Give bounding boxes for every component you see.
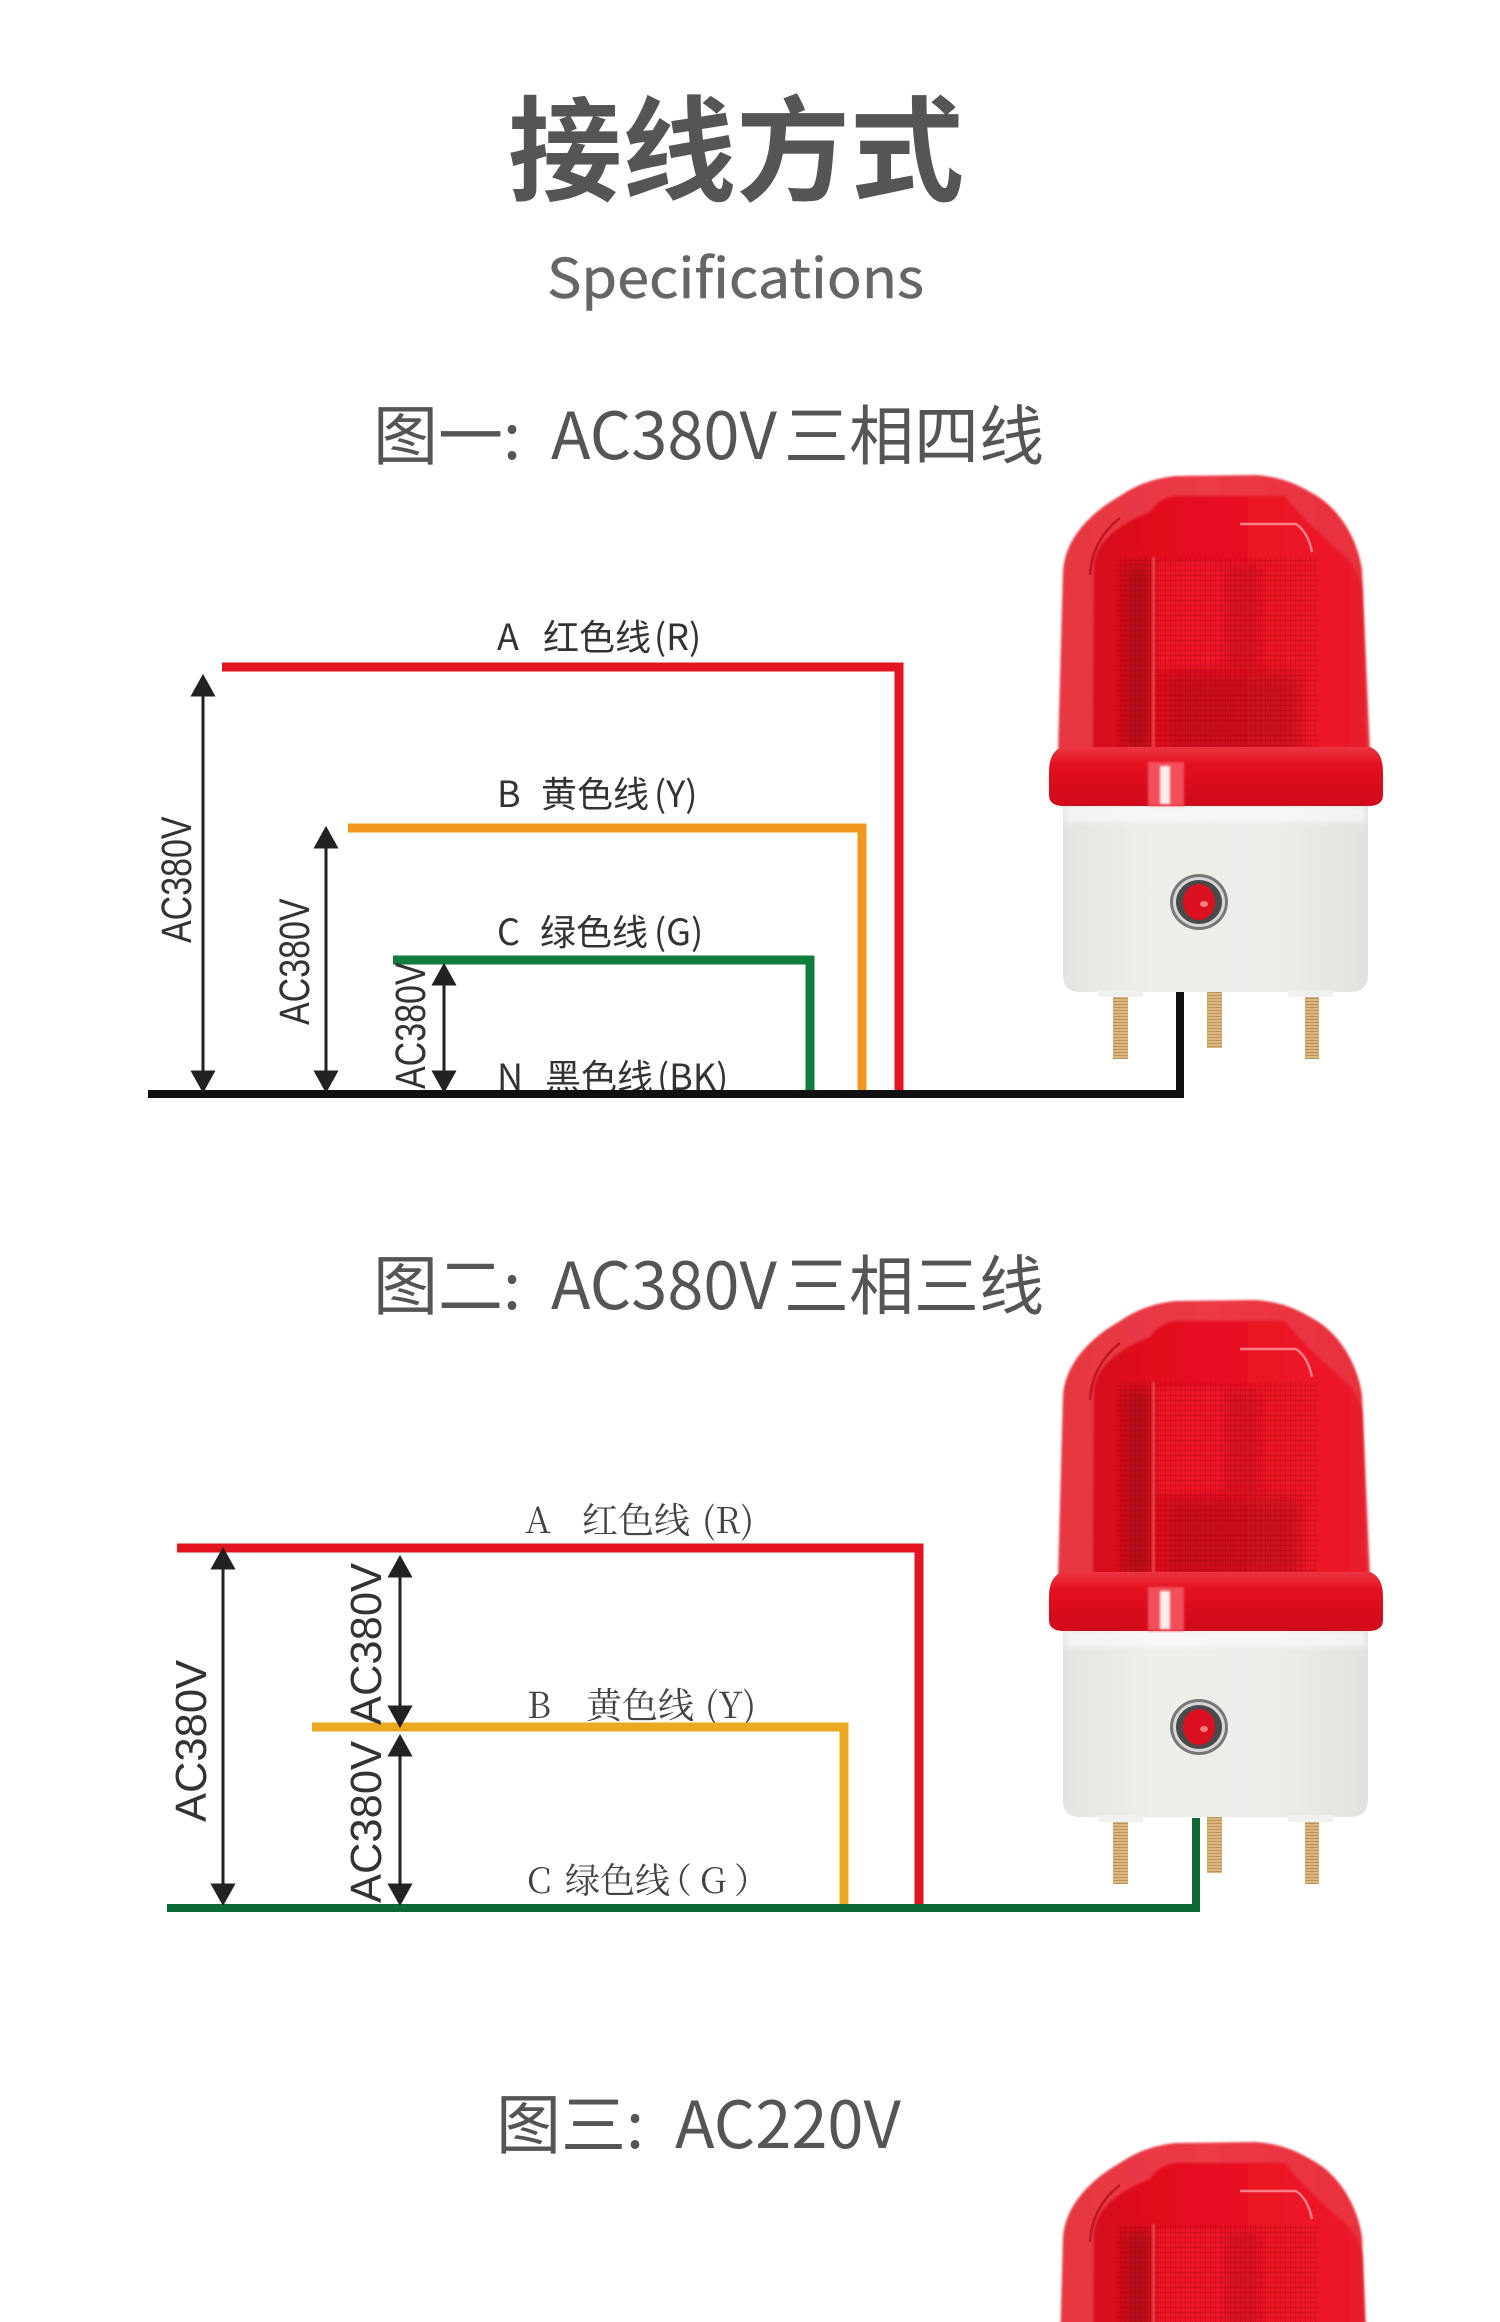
- heading: figure two: 图二:: [373, 1234, 521, 1328]
- wire: red A: [177, 1548, 919, 1908]
- arrow: voltage B to C: [390, 1737, 410, 1903]
- heading: figure one: 图一:: [373, 384, 521, 478]
- icon: warning lamp two: [1049, 1300, 1383, 1884]
- lens dome: [1058, 1300, 1370, 1577]
- label: C green wire: (G): [654, 904, 703, 956]
- wire: red A: [222, 667, 899, 1094]
- heading: figure two: 三相三线: [784, 1234, 1044, 1328]
- voltage label three: AC380V: [387, 962, 435, 1089]
- icon: warning lamp three, cropped by the page edge: [1058, 2142, 1370, 2322]
- label: B yellow wire: 黄色线: [586, 1678, 694, 1729]
- base: [1063, 806, 1368, 997]
- indicator light: [1170, 874, 1228, 930]
- wire: yellow B: [312, 1727, 844, 1908]
- label: B yellow wire: 黄色线: [541, 766, 649, 818]
- arrow: voltage B to N: [316, 829, 336, 1090]
- label: A red wire: 红色线: [582, 1493, 690, 1544]
- voltage label one: AC380V: [168, 1660, 216, 1822]
- panel: figure one wiring diagram: [148, 609, 1180, 1101]
- label: N black wire: N: [497, 1049, 523, 1101]
- arrow: voltage A to N: [193, 677, 213, 1090]
- label: N black wire: (BK): [657, 1049, 728, 1101]
- label: C green wire: 绿色线: [565, 1854, 670, 1904]
- label: B yellow wire: B: [497, 766, 521, 818]
- heading: figure three: 图三:: [496, 2073, 644, 2167]
- pins: [1113, 992, 1319, 1059]
- wire: green C: [167, 1818, 1196, 1908]
- label: C green wire: C: [497, 904, 520, 956]
- subtitle: Specifications: [547, 234, 924, 314]
- lens dome: [1058, 475, 1370, 752]
- label: A red wire: 红色线: [543, 609, 651, 661]
- heading: figure one: AC380V: [551, 384, 778, 478]
- label: B yellow wire: (Y): [705, 1678, 756, 1729]
- label: N black wire: 黑色线: [545, 1049, 653, 1101]
- label: B yellow wire: B: [527, 1678, 551, 1729]
- panel: figure two wiring diagram: [167, 1493, 1196, 1908]
- heading: figure two: AC380V: [551, 1234, 778, 1328]
- indicator light: [1170, 1699, 1228, 1755]
- voltage label two: AC380V: [343, 1563, 391, 1725]
- label: C green wire: （G）: [657, 1854, 777, 1904]
- label: C green wire: C: [527, 1854, 551, 1904]
- arrow: voltage A to C: [213, 1550, 233, 1903]
- voltage label three: AC380V: [343, 1741, 391, 1903]
- base: [1063, 1631, 1368, 1822]
- voltage label two: AC380V: [271, 898, 319, 1025]
- lens dome: [1058, 2142, 1370, 2322]
- label: C green wire: 绿色线: [540, 904, 648, 956]
- voltage label one: AC380V: [153, 816, 201, 943]
- label: B yellow wire: (Y): [654, 766, 697, 818]
- wire: orange B: [348, 828, 862, 1094]
- label: A red wire: (R): [654, 609, 701, 661]
- label: A red wire: A: [497, 609, 519, 661]
- title: 接线方式: [508, 60, 964, 225]
- rim: [1049, 1572, 1383, 1631]
- icon: warning lamp one: [1049, 475, 1383, 1059]
- label: A red wire: (R): [702, 1493, 754, 1544]
- wire: green C: [393, 960, 810, 1094]
- arrow: voltage C to N: [434, 966, 454, 1090]
- rim: [1049, 747, 1383, 806]
- arrow: voltage A to B: [390, 1558, 410, 1725]
- heading: figure one: 三相四线: [784, 384, 1044, 478]
- label: A red wire: A: [525, 1493, 551, 1544]
- pins: [1113, 1817, 1319, 1884]
- heading: figure three: AC220V: [675, 2073, 902, 2167]
- wire: black N: [148, 992, 1180, 1094]
